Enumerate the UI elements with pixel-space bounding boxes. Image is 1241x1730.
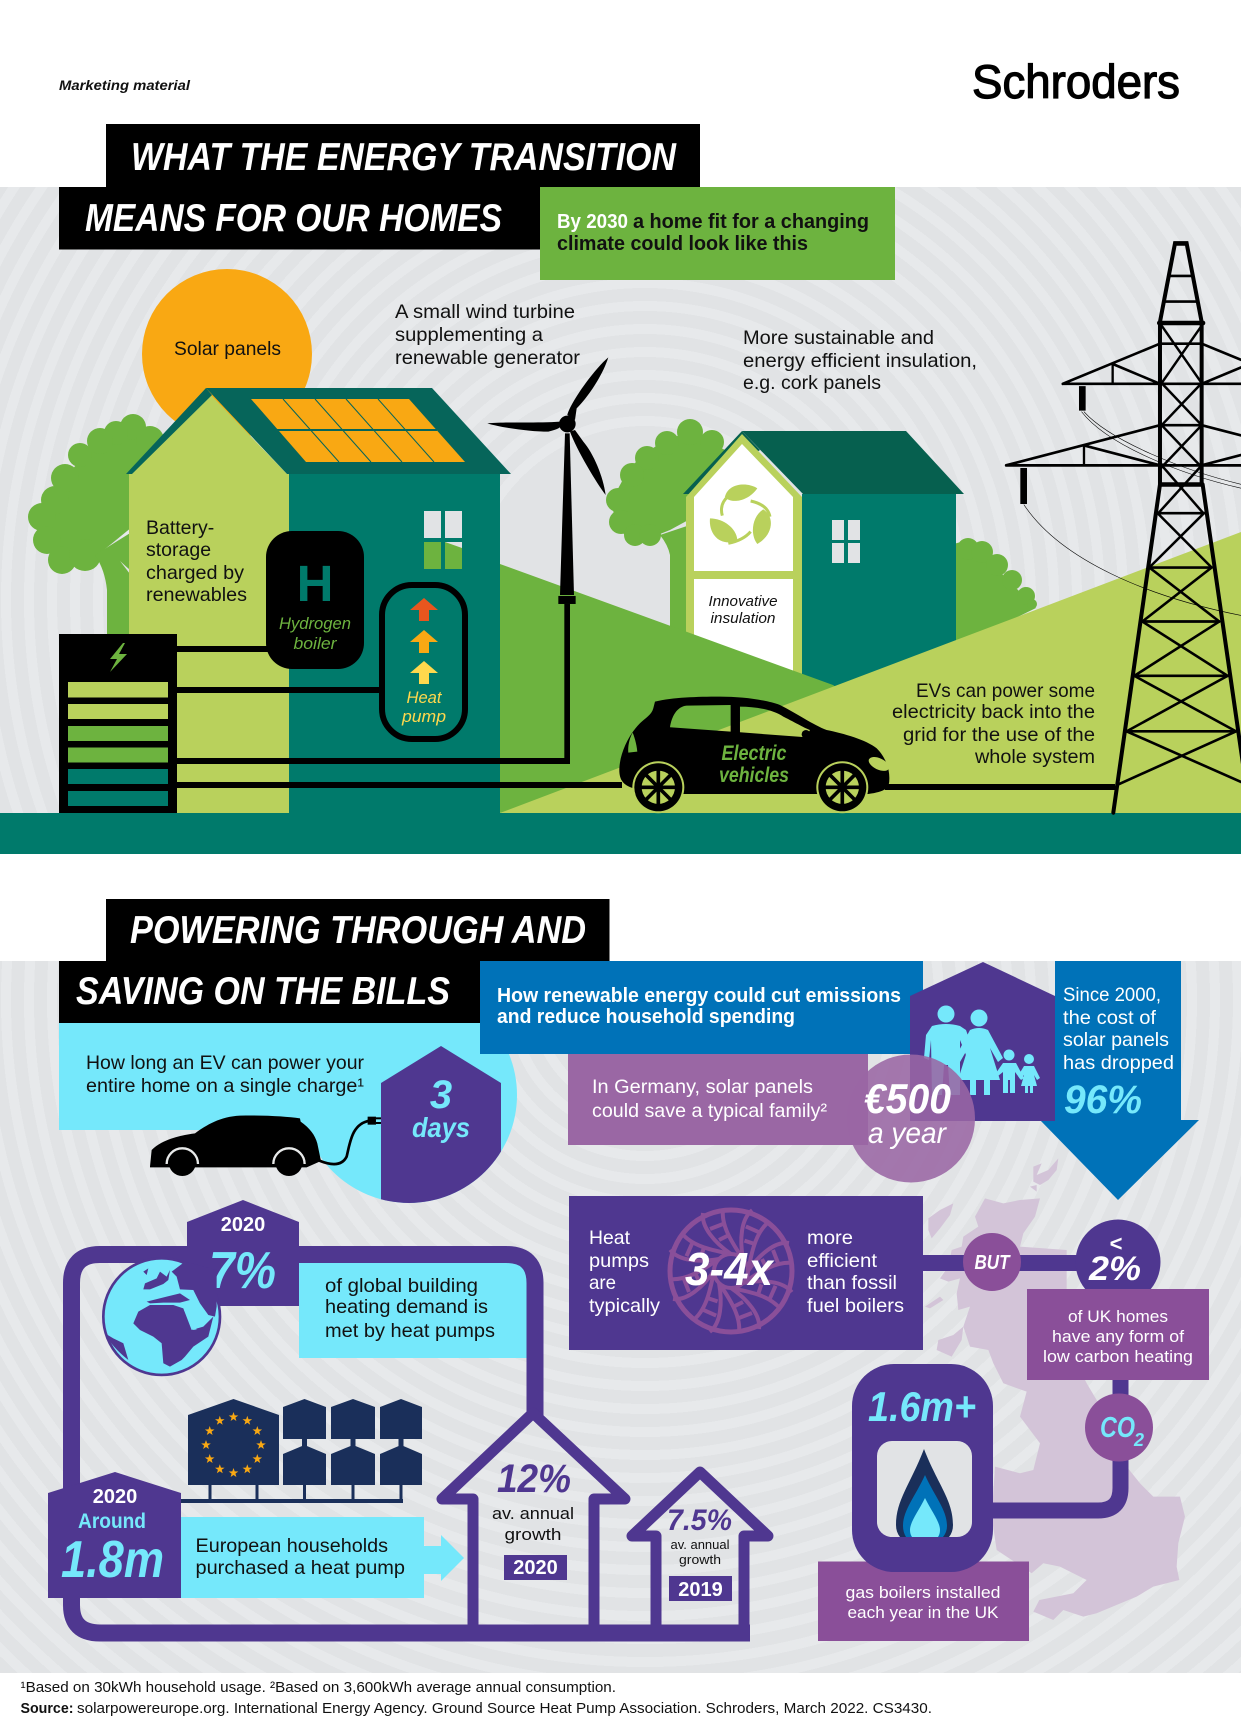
panel: heat pump efficiency: efficient [807, 1250, 878, 1272]
panel: heat pump efficiency [569, 1196, 923, 1350]
badge: CO2: CO [1100, 1412, 1135, 1444]
text: battery storage: Battery- [146, 517, 214, 539]
house: 12 percent growth 2020: growth [504, 1525, 562, 1544]
house: 12 percent growth 2020 [442, 1413, 625, 1628]
panel: heat pump efficiency: more [807, 1227, 853, 1249]
heat pump: pump [401, 707, 446, 726]
hydrogen boiler: H [297, 555, 333, 612]
house: 7.5 percent growth 2019 [632, 1472, 768, 1628]
connector: CO2 pipe [985, 1375, 1120, 1510]
text: how long an EV can power: entire home on a single charge¹ [86, 1075, 365, 1097]
text: how long an EV can power [86, 1052, 365, 1097]
badge: but: BUT [974, 1252, 1011, 1274]
house badge: around 1.8m: Around [78, 1510, 146, 1533]
text: EVs power the grid: grid for the use of the [903, 724, 1095, 746]
EU flag stars [201, 1412, 266, 1477]
label: electric vehicles [719, 742, 789, 787]
wind turbine [487, 357, 608, 764]
icon: charging car [150, 1116, 381, 1176]
icon: bush [950, 538, 1037, 650]
panel: heat pump efficiency: are [589, 1272, 616, 1294]
panel: blue header: How renewable energy could cut emissions [497, 985, 901, 1007]
text: wind turbine: supplementing a [395, 324, 543, 346]
big house [126, 388, 511, 813]
panel: European households: European households [196, 1535, 388, 1557]
hydrogen boiler [266, 531, 364, 669]
house badge: 2020 7% [187, 1200, 299, 1306]
text: EVs power the grid [892, 680, 1095, 768]
green hill [500, 564, 870, 813]
panel: global heating text box: heating demand is [325, 1296, 488, 1318]
label: innovative insulation: Innovative [708, 593, 778, 610]
text: EVs power the grid: electricity back into the [892, 701, 1095, 723]
footnotes [20, 1679, 932, 1717]
footnotes: Source: [20, 1700, 74, 1717]
text: battery storage: charged by [146, 562, 244, 584]
callout: by 2030: By 2030 [557, 211, 628, 233]
arrow: solar panel cost drop: the cost of [1063, 1007, 1157, 1029]
arrow: red [410, 598, 438, 621]
house: 7.5 percent growth 2019: 2019 [678, 1579, 723, 1601]
panel: EV home power [59, 1023, 517, 1203]
text: how long an EV can power: How long an EV can power your [86, 1052, 364, 1074]
panel: heat pump efficiency: pumps [589, 1250, 649, 1272]
panel: gas boilers: each year in the UK [848, 1603, 999, 1622]
house: 12 percent growth 2020: 2020 [513, 1557, 558, 1579]
label: innovative insulation: insulation [710, 610, 776, 627]
panel: Germany saving: €500 [864, 1075, 951, 1122]
panel: gas boilers: 1.6m+ [868, 1383, 976, 1430]
house: 12 percent growth 2020: 12% [497, 1457, 571, 1501]
big house window [424, 511, 462, 569]
purple house: 3 days: days [412, 1112, 470, 1143]
Schroders logo: Schroders [972, 55, 1180, 108]
panel: heat pump efficiency: Heat [589, 1227, 631, 1249]
arrow: solar panel cost drop [1040, 961, 1199, 1200]
connector: heat pump to 2 percent [923, 1255, 1093, 1271]
text: wind turbine [395, 301, 581, 369]
icon: sun with solar panels label: Solar panels [174, 338, 281, 360]
EU houses chart [181, 1399, 422, 1503]
marketing label: Marketing material [59, 78, 190, 93]
panel: UK homes: of UK homes [1068, 1308, 1168, 1326]
badge: but [963, 1233, 1021, 1291]
icon: small house tree [606, 419, 725, 640]
background band: bottom section [0, 961, 1241, 1673]
house badge: around 1.8m [48, 1472, 181, 1598]
pipe: heat pump outline [72, 1254, 750, 1633]
badge: under 2 percent: < [1110, 1231, 1122, 1256]
house badge: around 1.8m: 2020 [93, 1486, 137, 1508]
text: EVs power the grid: whole system [974, 746, 1095, 768]
ground [0, 813, 1241, 854]
badge: CO2 [1085, 1394, 1153, 1462]
panel: UK homes: have any form of [1052, 1328, 1184, 1346]
heat pump: Heat [406, 688, 443, 707]
text: EVs power the grid: EVs can power some [916, 680, 1095, 702]
panel: Germany saving: could save a typical family² [592, 1100, 828, 1122]
panel: European households [181, 1517, 464, 1598]
light green hill [500, 532, 1241, 813]
house badge: around 1.8m: 1.8m [61, 1531, 164, 1589]
text: wind turbine: A small wind turbine [395, 301, 575, 323]
arrow: solar panel cost drop: 96% [1064, 1078, 1142, 1122]
badge: under 2 percent [1076, 1220, 1160, 1304]
panel: heat pump efficiency: than fossil [807, 1272, 897, 1294]
small house [683, 431, 964, 690]
panel: Germany saving [568, 1054, 975, 1182]
purple house: 3 days [381, 1046, 501, 1210]
panel: global heating text box: met by heat pumps [325, 1320, 495, 1342]
icon: recycling leaves [710, 485, 771, 544]
electric car [619, 697, 891, 813]
panel: Germany saving: a year [868, 1117, 947, 1150]
panel: heat pump efficiency: typically [589, 1295, 660, 1317]
label: innovative insulation [708, 593, 778, 627]
label: electric vehicles: vehicles [719, 764, 789, 787]
house: 7.5 percent growth 2019: growth [679, 1552, 721, 1567]
icon: globe [103, 1258, 220, 1375]
arrow: orange [410, 630, 438, 653]
arrow: solar panel cost drop: solar panels [1063, 1029, 1169, 1051]
panel: blue header [480, 961, 923, 1054]
icon: fan [667, 1207, 795, 1335]
text: insulation [743, 327, 977, 394]
callout: by 2030 [540, 187, 895, 280]
panel: global heating text box [299, 1263, 527, 1358]
panel: UK homes: low carbon heating [1043, 1348, 1193, 1366]
badge: under 2 percent: 2% [1088, 1250, 1141, 1288]
text: insulation: e.g. cork panels [743, 372, 881, 394]
text: battery storage: renewables [146, 584, 247, 606]
arrow: yellow [410, 661, 438, 684]
icon: sun with solar panels label [142, 269, 312, 439]
house badge: 2020 7%: 7% [209, 1242, 276, 1300]
panel: UK homes [1027, 1289, 1209, 1380]
title block: energy transition [59, 124, 700, 250]
house: 12 percent growth 2020: av. annual [492, 1504, 574, 1523]
title block: energy transition: WHAT THE ENERGY TRANSITION [131, 136, 677, 179]
text: insulation: energy efficient insulation, [743, 350, 977, 372]
connector cables [177, 646, 1115, 790]
UK map [925, 1158, 1185, 1620]
footnotes: solarpowereurope.org. International Energy Agency. Ground Source Heat Pump Association. Schroders, March 2022. CS3430. [77, 1700, 932, 1717]
panel: heat pump efficiency: fuel boilers [807, 1295, 904, 1317]
text: battery storage [146, 517, 247, 606]
panel: global heating text box: of global building [325, 1275, 478, 1297]
text: insulation: More sustainable and [743, 327, 934, 349]
arrow: solar panel cost drop: Since 2000, [1063, 984, 1161, 1006]
hydrogen boiler: Hydrogen [279, 614, 351, 633]
panel: gas boilers: gas boilers installed [846, 1583, 1000, 1602]
title block: energy transition: MEANS FOR OUR HOMES [85, 197, 502, 240]
text: battery storage: storage [146, 539, 211, 561]
icon: lightning bolt [110, 643, 127, 672]
title block: powering through: SAVING ON THE BILLS [76, 970, 450, 1013]
label: electric vehicles: Electric [722, 742, 787, 765]
battery [59, 634, 177, 813]
panel: European households: purchased a heat pump [196, 1557, 405, 1579]
hydrogen boiler: boiler [294, 634, 338, 653]
icon: family [924, 1006, 1040, 1095]
panel: Germany saving: In Germany, solar panels [592, 1076, 813, 1098]
purple house: 3 days: 3 [430, 1073, 452, 1117]
icon: flame [896, 1449, 953, 1537]
title block: powering through: POWERING THROUGH AND [130, 909, 586, 952]
panel: heat pump efficiency: 3-4x [685, 1243, 775, 1295]
callout: by 2030: climate could look like this [557, 233, 808, 255]
arrow: to growth house [424, 1535, 464, 1581]
house: 7.5 percent growth 2019: av. annual [670, 1537, 730, 1552]
panel: gas boilers [818, 1364, 1029, 1641]
small house window [832, 520, 860, 563]
family house [910, 962, 1055, 1121]
title block: powering through [59, 899, 610, 1023]
text: wind turbine: renewable generator [395, 347, 581, 369]
heat pump [382, 585, 465, 739]
icon: left tree [28, 414, 165, 640]
badge: CO2: 2 [1133, 1430, 1144, 1450]
house badge: 2020 7%: 2020 [221, 1214, 265, 1236]
electricity pylon [1006, 243, 1241, 812]
house: 7.5 percent growth 2019: 7.5% [667, 1504, 732, 1537]
footnotes: ¹Based on 30kWh household usage. ²Based on 3,600kWh average annual consumption. [20, 1679, 616, 1696]
solar panels [251, 399, 465, 462]
panel: blue header: and reduce household spending [497, 1006, 795, 1028]
background band: top section [0, 187, 1241, 813]
callout: by 2030: a home fit for a changing [633, 211, 869, 233]
arrow: solar panel cost drop: has dropped [1063, 1052, 1174, 1074]
